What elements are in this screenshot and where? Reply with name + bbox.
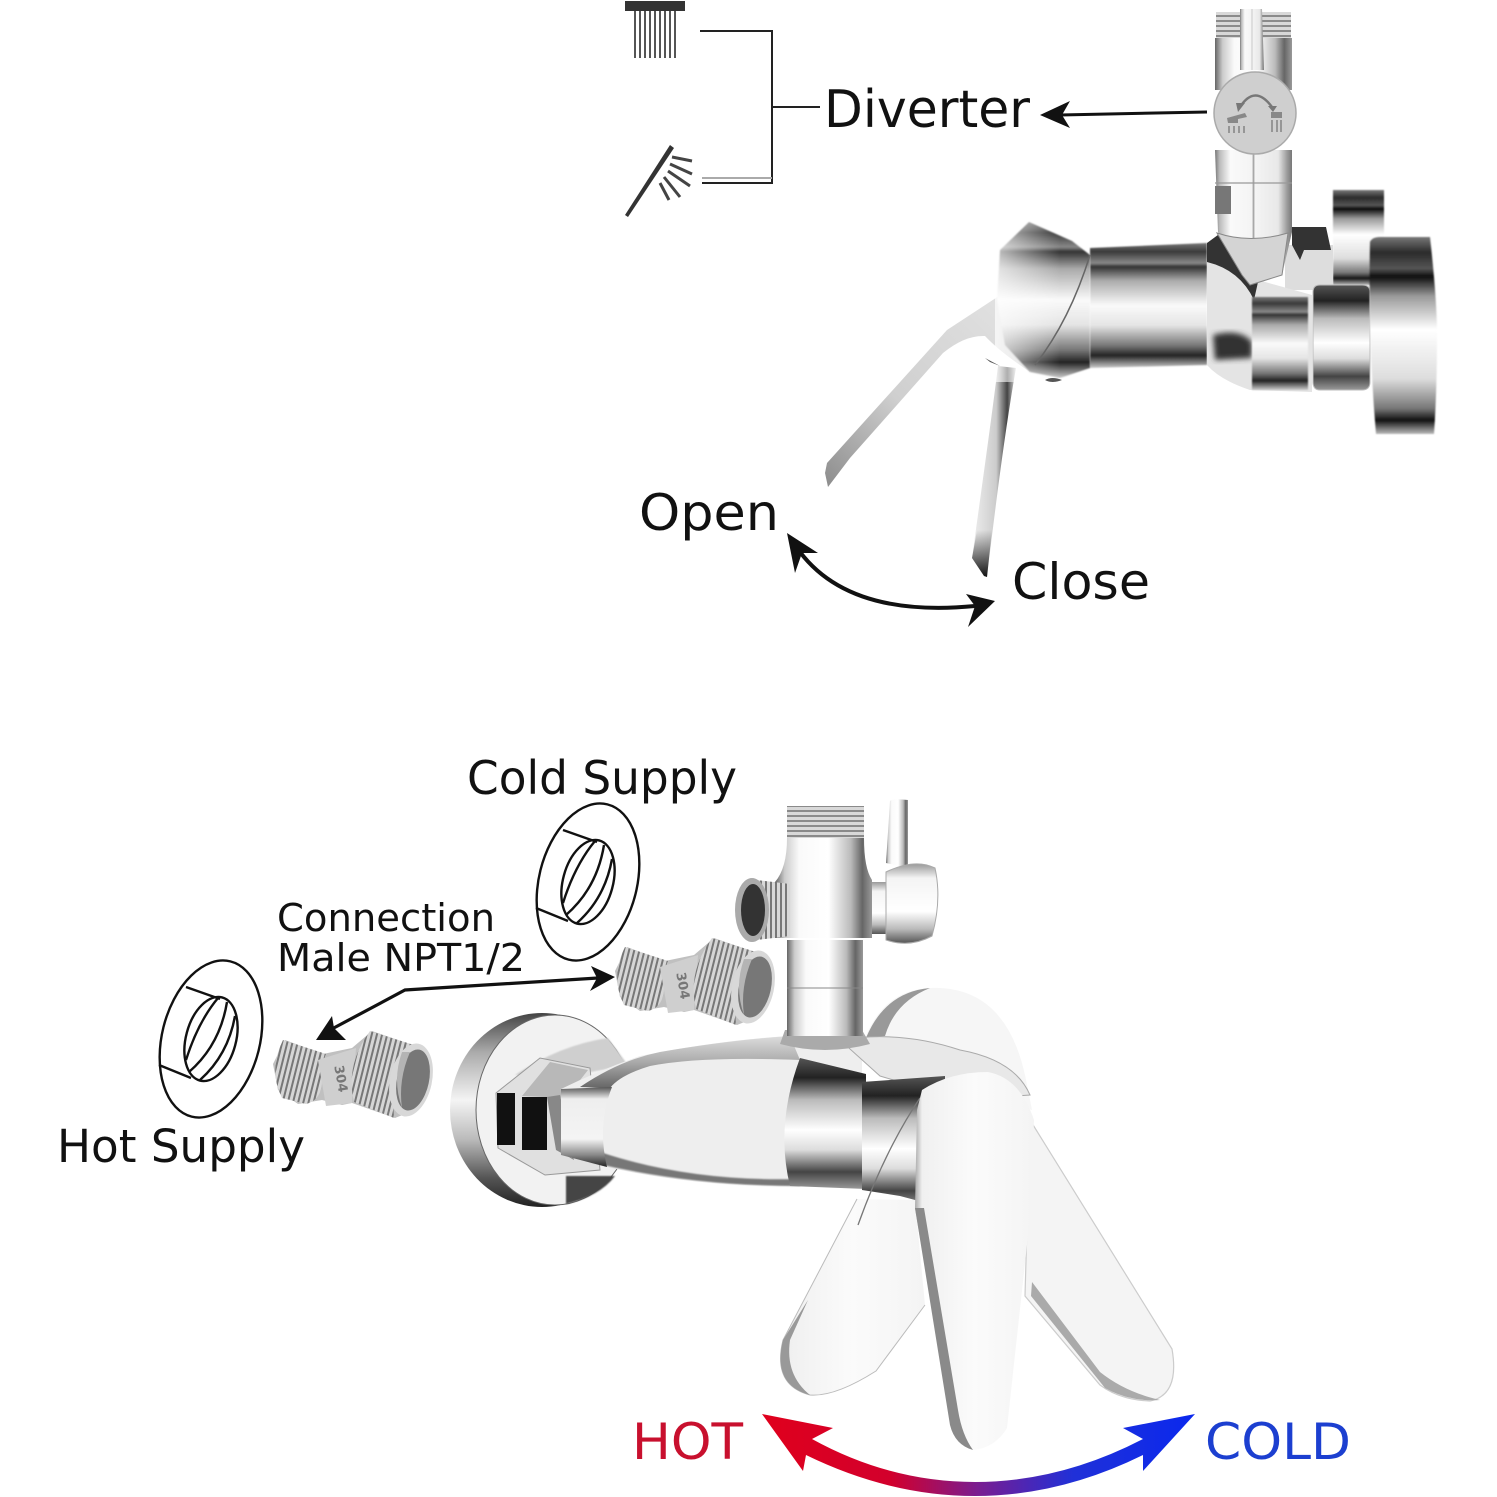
diverter stem upper <box>1215 38 1292 90</box>
closed lever <box>972 366 1016 577</box>
label: Cold Supply: Cold Supply <box>467 751 737 805</box>
screw heads under the hub <box>985 358 1062 382</box>
hexagon nut <box>496 1058 600 1175</box>
arrow: connection pointing to both adapters <box>316 966 615 1040</box>
drawing: cold supply wall hole <box>521 793 655 971</box>
front wall plate <box>1370 237 1437 434</box>
T-fitting upper stem <box>775 838 872 938</box>
ghost lever: hot position <box>781 1199 925 1395</box>
main lever <box>915 1072 1034 1450</box>
label: Close: Close <box>1012 553 1150 611</box>
wall flange <box>450 1013 634 1207</box>
lower socket <box>1252 297 1308 390</box>
label: Diverter: Diverter <box>824 80 1031 140</box>
drawing: hot supply wall hole <box>144 950 278 1128</box>
adapter: hot side <box>273 1031 439 1121</box>
bracket connecting shower icons to diverter label <box>700 31 820 183</box>
icon: overhead rain shower head <box>625 1 685 58</box>
body collar <box>784 1058 866 1189</box>
dark fitting behind the stem <box>1292 227 1331 260</box>
elbow <box>1207 232 1312 392</box>
T-fitting top thread <box>787 806 864 838</box>
T-fitting lever pin <box>886 799 908 868</box>
top faucet, side view <box>825 9 1437 577</box>
label: HOT: HOT <box>632 1413 743 1471</box>
shoulder behind lever <box>840 1037 1030 1100</box>
label: Connection Male NPT1/2: Male NPT1/2 <box>277 936 525 980</box>
diverter knob <box>1214 72 1296 154</box>
label: Connection Male NPT1/2: Connection <box>277 896 495 940</box>
T-fitting left thread <box>748 879 790 941</box>
mounting collar below T-fitting <box>780 1030 870 1050</box>
hex nut <box>1313 285 1370 390</box>
fitting behind the stem <box>1285 245 1333 290</box>
arrow: diverter knob to label <box>1040 101 1207 128</box>
main cylinder <box>1090 243 1207 368</box>
T-fitting right knob <box>886 864 938 943</box>
label: COLD: COLD <box>1205 1413 1351 1471</box>
main lever shaded edge <box>915 1208 973 1450</box>
top chrome strip of body <box>580 1036 800 1088</box>
label: Hot Supply: Hot Supply <box>57 1120 305 1173</box>
neck <box>561 1087 612 1167</box>
arrow: hot to cold gradient <box>762 1414 1195 1496</box>
label: Open: Open <box>639 484 779 542</box>
open lever <box>825 292 1030 487</box>
bottom faucet, front view <box>450 799 1174 1450</box>
rear lever silhouette <box>866 988 1032 1110</box>
T-fitting lower stem <box>787 940 863 1036</box>
T-fitting horizontal <box>770 882 890 934</box>
diverter stem lower <box>1215 150 1292 275</box>
ghost lever: cold position <box>1025 1120 1174 1401</box>
main body <box>561 1036 862 1188</box>
lower shadow of body <box>590 1152 800 1186</box>
arrow: open and close direction <box>787 533 995 627</box>
handle hub <box>997 222 1090 378</box>
handle head <box>862 1076 945 1208</box>
diverter lever <box>1240 9 1264 70</box>
back wall plate <box>1333 190 1384 285</box>
adapter: cold side <box>615 938 781 1028</box>
label: Connection Male NPT1/2 <box>277 896 525 980</box>
icon: hand shower <box>625 145 692 217</box>
